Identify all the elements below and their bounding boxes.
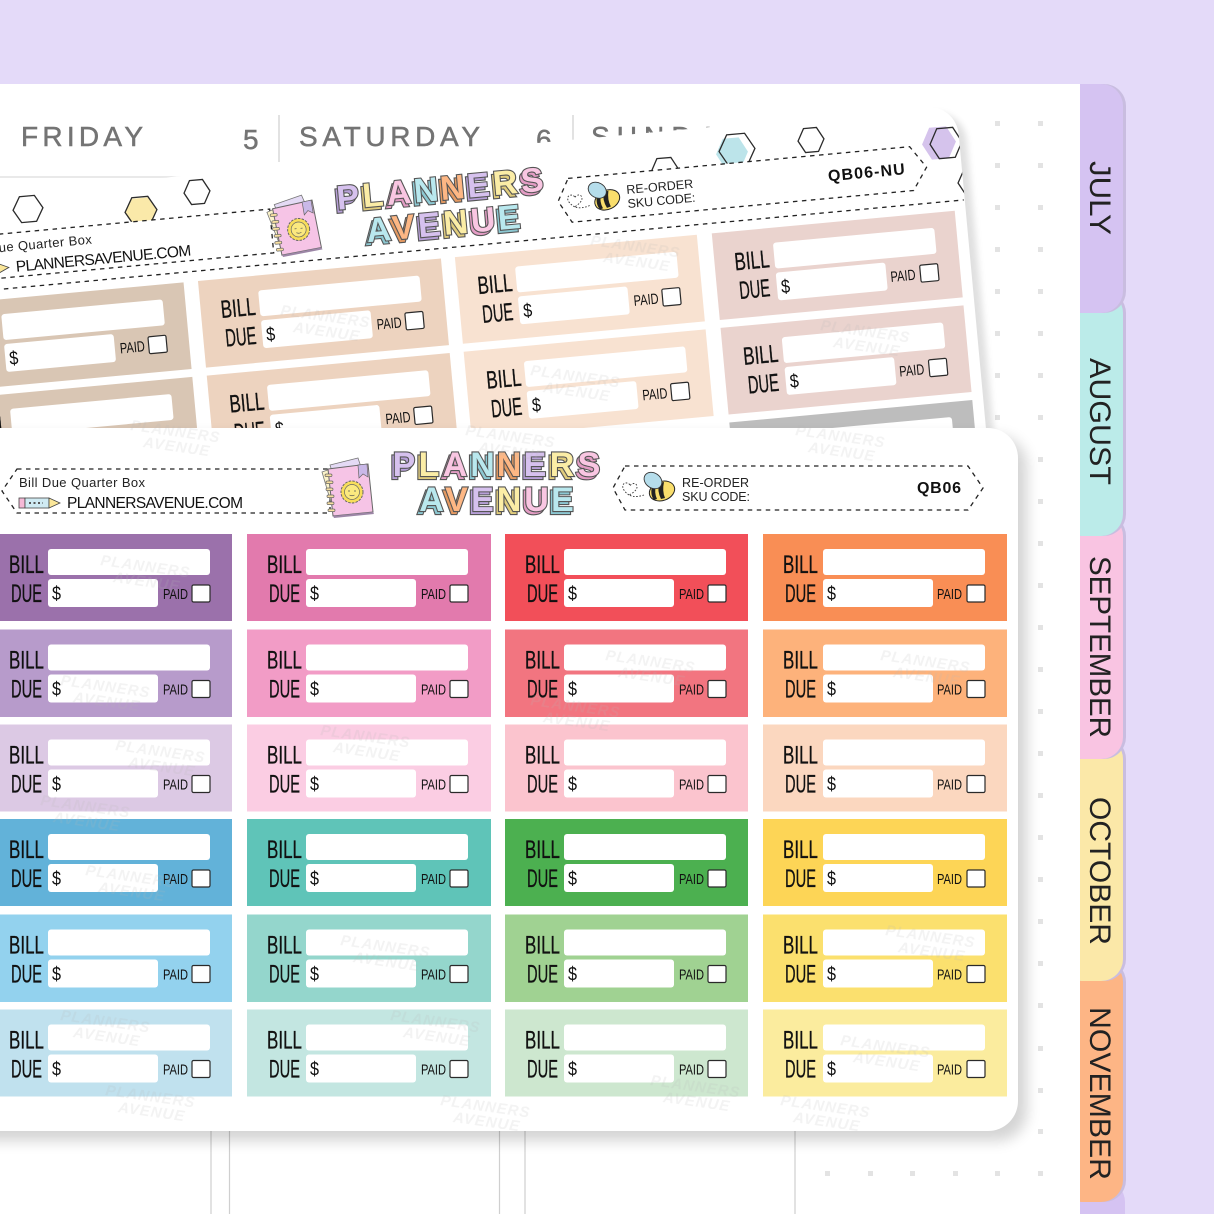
watermarks: PLANNERS [129,417,221,447]
box row 1 col 2: PAID [421,586,446,603]
box row 6 col 1: BILL [9,1026,44,1054]
box row 1 col 2 [247,534,491,621]
box row 6 col 4: PAID [937,1062,962,1078]
watermarks: AVENUE [541,379,611,405]
box row 6 col 1: DUE [11,1056,42,1084]
back box: tan top: $ [265,324,277,346]
box row 1 col 1: $ [52,584,61,605]
back sku label [556,145,929,223]
box row 4 col 4 [763,819,1007,906]
box row 4 col 2: DUE [269,865,300,893]
watermarks: PLANNERS [59,1007,151,1037]
tab: August [1060,291,1126,536]
front sku label: RE-ORDER [682,476,749,490]
box row 1 col 4 [763,534,1007,621]
box row 5 col 4: DUE [785,960,816,988]
box row 4 col 2 [247,819,491,906]
back box: peach top: BILL [476,269,514,300]
tab: October: OCTOBER [1083,797,1116,945]
front left label: Bill Due Quarter Box [19,475,146,490]
watermarks: AVENUE [71,1024,141,1050]
watermarks: PLANNERS [59,672,151,702]
back left label [0,194,323,297]
watermarks: AVENUE [96,879,166,905]
back box: peach second: BILL [485,364,523,395]
box row 6 col 1 [0,1010,232,1096]
watermarks: AVENUE [331,739,401,765]
box row 6 col 1: PAID [163,1062,188,1078]
back box: peach top [455,235,705,344]
box row 4 col 3: DUE [527,865,558,893]
box row 2 col 1: BILL [9,646,44,674]
box row 2 col 2: BILL [267,646,302,674]
page edge [1060,84,1080,1214]
box row 6 col 3: DUE [527,1056,558,1084]
box row 2 col 1: $ [52,680,61,700]
back box: tan second: DUE [233,417,266,447]
box row 3 col 4: DUE [785,770,816,798]
watermarks: PLANNERS [319,722,411,752]
planner day headings [21,121,741,155]
box row 2 col 1: DUE [11,676,42,704]
front sku label [613,466,983,510]
box row 4 col 1: DUE [11,865,42,893]
box row 6 col 2: PAID [421,1062,446,1078]
front sticker sheet: brights [0,428,1027,1141]
back logo: PLANNERS [335,161,545,218]
tab: July: JULY [1083,161,1116,235]
watermarks: AVENUE [806,439,876,465]
front logo: AVENUE [419,481,574,519]
box row 3 col 4 [763,724,1007,812]
back sku label: RE-ORDER [626,177,694,197]
back box: rose top [712,211,963,320]
back box: peach top: $ [522,300,533,322]
box row 5 col 1: PAID [163,966,188,984]
watermarks: AVENUE [71,689,141,715]
month tabs [1060,84,1126,1214]
box row 4 col 1: $ [52,869,61,890]
watermarks: AVENUE [601,249,671,275]
box row 3 col 2 [247,724,491,812]
box row 1 col 1: BILL [9,551,44,579]
back logo: AVENUE [365,198,522,250]
box row 3 col 3: DUE [527,770,558,798]
watermarks: AVENUE [116,1099,186,1125]
back logo [332,161,549,256]
planner day headings: FRIDAY [21,121,143,152]
box row 1 col 3: PAID [679,586,704,603]
box row 5 col 2: BILL [267,932,302,960]
box row 4 col 3: $ [568,869,577,890]
tab: next month [1062,1180,1125,1214]
front logo: PLANNERS [390,449,598,487]
box row 3 col 2: $ [310,774,319,796]
front sheet base [0,428,1018,1131]
back cut line [0,200,964,303]
back box: taupe top: PAID [119,338,146,357]
watermarks: PLANNERS [604,647,696,677]
box row 1 col 2: DUE [269,580,300,608]
front sku label: QB06 [917,480,961,497]
back box: peach second: $ [531,395,542,417]
watermarks: PLANNERS [464,422,556,452]
back box: taupe second [0,377,200,486]
box row 2 col 3: DUE [527,676,558,704]
watermarks: PLANNERS [39,792,131,822]
watermarks: AVENUE [831,334,901,360]
box row 6 col 4: $ [827,1060,836,1080]
tab: November [1060,960,1126,1202]
box row 6 col 2: BILL [267,1026,302,1054]
box row 1 col 4: PAID [937,586,962,603]
watermarks: AVENUE [896,939,966,965]
box row 4 col 4: BILL [783,836,818,864]
planner day headings: 6 [536,124,552,155]
watermarks: PLANNERS [529,362,621,392]
box row 2 col 2: DUE [269,676,300,704]
box row 2 col 3 [505,630,748,717]
box row 3 col 1 [0,724,232,812]
box row 3 col 1: $ [52,774,61,796]
box row 3 col 4: BILL [783,742,818,770]
watermarks: AVENUE [291,319,361,345]
back sku label: SKU CODE: [627,191,696,211]
box row 5 col 1: $ [52,964,61,986]
back box: peach second [464,329,714,438]
box row 5 col 1 [0,914,232,1002]
watermarks: PLANNERS [779,1092,871,1122]
box row 4 col 2: PAID [421,871,446,888]
box row 1 col 3: BILL [525,551,560,579]
watermarks: PLANNERS [99,552,191,582]
box row 5 col 4: PAID [937,966,962,984]
decorative hexagons [12,126,983,227]
box row 3 col 3: BILL [525,742,560,770]
watermarks: PLANNERS [649,1072,741,1102]
box row 3 col 4: PAID [937,776,962,794]
planner day headings: SUNDAY [591,121,741,152]
back box: tan top: BILL [219,293,257,324]
box row 6 col 4 [763,1010,1007,1096]
planner day headings: 5 [243,124,259,155]
back box: peach second: DUE [490,393,523,423]
planner day headings: SATURDAY [299,121,480,152]
back box: tan second: PAID [385,409,411,428]
back box: rose second: DUE [747,369,780,400]
watermarks: AVENUE [451,1109,521,1135]
watermarks: PLANNERS [104,1082,196,1112]
box row 1 col 3: $ [568,584,577,605]
watermarks: PLANNERS [819,317,911,347]
box row 6 col 3: $ [568,1060,577,1080]
front logo: PLANNERS [393,446,600,484]
box row 2 col 3: BILL [525,646,560,674]
box row 5 col 3: DUE [527,960,558,988]
box row 6 col 3: BILL [525,1026,560,1054]
watermarks: PLANNERS [589,232,681,262]
box row 4 col 2: BILL [267,836,302,864]
box row 4 col 1: BILL [9,836,44,864]
back box: rose top: BILL [733,245,771,276]
back box: peach top: DUE [481,298,514,329]
box row 3 col 3 [505,724,748,812]
box row 1 col 3 [505,534,748,621]
watermarks: AVENUE [851,1049,921,1075]
box row 1 col 1 [0,534,232,621]
box row 2 col 1: PAID [163,682,188,698]
back box: tan second: $ [274,419,285,440]
box row 2 col 4: PAID [937,682,962,698]
box row 3 col 4: $ [827,774,836,796]
box row 1 col 4: DUE [785,580,816,608]
box row 6 col 2 [247,1010,491,1096]
box row 6 col 2: $ [310,1060,319,1080]
back box: taupe top: $ [8,348,20,370]
back box: rose top: $ [780,276,791,298]
box row 2 col 1 [0,630,232,717]
box row 3 col 1: PAID [163,776,188,794]
watermarks: AVENUE [476,439,546,465]
box row 4 col 1: PAID [163,871,188,888]
back box: tan top: PAID [376,314,403,334]
box row 3 col 1: DUE [11,770,42,798]
back box: taupe top [0,282,192,391]
watermarks: AVENUE [111,569,181,595]
box row 4 col 3: BILL [525,836,560,864]
box row 1 col 3: DUE [527,580,558,608]
box row 5 col 1: BILL [9,932,44,960]
back box: rose top: DUE [738,274,771,305]
back box: peach top: PAID [633,291,660,310]
watermarks: PLANNERS [839,1032,931,1062]
box row 2 col 4: BILL [783,646,818,674]
box row 1 col 4: $ [827,584,836,605]
back box: rose second: $ [789,371,800,393]
box row 1 col 4: BILL [783,551,818,579]
front left label: PLANNERSAVENUE.COM [67,495,243,512]
watermarks: AVENUE [791,1109,861,1135]
box row 2 col 2: PAID [421,682,446,698]
watermarks: AVENUE [891,664,961,690]
back box: rose second: BILL [742,340,780,371]
watermarks: PLANNERS [84,862,176,892]
watermarks: AVENUE [401,1024,471,1050]
back box: tan second: BILL [228,387,266,419]
box row 5 col 3 [505,914,748,1002]
planner dot grid [825,121,1043,1176]
watermarks: AVENUE [541,709,611,735]
watermarks: AVENUE [126,754,196,780]
watermarks: AVENUE [141,434,211,460]
box row 6 col 4: BILL [783,1026,818,1054]
box row 3 col 2: PAID [421,776,446,794]
front sku label: SKU CODE: [682,490,750,504]
box row 2 col 3: PAID [679,682,704,698]
front logo: AVENUE [417,484,571,522]
box row 4 col 2: $ [310,869,319,890]
box row 4 col 3 [505,819,748,906]
watermarks: PLANNERS [879,647,971,677]
box row 2 col 4: DUE [785,676,816,704]
tab: November: NOVEMBER [1083,1007,1116,1180]
box row 5 col 1: DUE [11,960,42,988]
box row 1 col 1: DUE [11,580,42,608]
watermarks: PLANNERS [279,302,371,332]
back sticker sheet: neutrals [0,113,996,428]
box row 5 col 4: BILL [783,932,818,960]
box row 5 col 2 [247,914,491,1002]
back logo: PLANNERS [333,164,543,221]
box row 4 col 1 [0,819,232,906]
watermarks: PLANNERS [389,1007,481,1037]
back box: tan top: DUE [224,322,258,353]
box row 3 col 3: $ [568,774,577,796]
box row 4 col 4: PAID [937,871,962,888]
back sheet base [0,104,1021,917]
box row 6 col 3: PAID [679,1062,704,1078]
box row 4 col 4: DUE [785,865,816,893]
back left label: PLANNERSAVENUE.COM [15,243,192,276]
planner column lines [0,115,795,1214]
box row 3 col 1: BILL [9,742,44,770]
watermarks: PLANNERS [884,922,976,952]
box row 1 col 2: $ [310,584,319,605]
watermarks: PLANNERS [339,932,431,962]
back box: grey third [729,400,980,509]
box row 3 col 2: BILL [267,742,302,770]
box row 5 col 4: $ [827,964,836,986]
box row 5 col 2: DUE [269,960,300,988]
box row 6 col 3 [505,1010,748,1096]
back sku label: QB06-NU [827,161,905,185]
watermarks: AVENUE [51,809,121,835]
tab: October [1060,737,1126,981]
watermarks: PLANNERS [794,422,886,452]
box row 6 col 4: DUE [785,1056,816,1084]
box row 2 col 2: $ [310,680,319,700]
front sheet shadow [0,436,1027,1141]
back box: peach second: PAID [642,385,668,404]
box row 2 col 2 [247,630,491,717]
box row 5 col 4 [763,914,1007,1002]
box row 5 col 2: PAID [421,966,446,984]
box row 6 col 2: DUE [269,1056,300,1084]
watermarks: AVENUE [661,1089,731,1115]
box row 2 col 4: $ [827,680,836,700]
back box: tan top [198,258,449,368]
watermarks [37,232,976,1136]
front left label [2,458,374,518]
back box: rose second [721,305,972,415]
box row 2 col 4 [763,630,1007,717]
watermarks: AVENUE [616,664,686,690]
front logo [390,446,600,522]
box row 5 col 3: BILL [525,932,560,960]
watermarks: AVENUE [351,949,421,975]
watermarks: PLANNERS [439,1092,531,1122]
watermarks: PLANNERS [114,737,206,767]
box row 3 col 2: DUE [269,770,300,798]
box row 1 col 2: BILL [267,551,302,579]
watermarks: PLANNERS [529,692,621,722]
back box: rose second: PAID [899,361,925,381]
back box: tan second [207,353,458,462]
tab: July [1060,84,1126,313]
back logo: AVENUE [362,201,520,253]
back box: rose top: PAID [890,267,916,286]
box row 5 col 3: $ [568,964,577,986]
box row 6 col 1: $ [52,1060,61,1080]
tab: August: AUGUST [1083,358,1116,485]
back sheet shadow [948,113,996,428]
tab: September: SEPTEMBER [1083,556,1116,738]
box row 3 col 3: PAID [679,776,704,794]
box row 5 col 3: PAID [679,966,704,984]
box row 2 col 3: $ [568,680,577,700]
box row 4 col 3: PAID [679,871,704,888]
box row 1 col 1: PAID [163,586,188,603]
tab: September [1060,514,1126,759]
box row 5 col 2: $ [310,964,319,986]
box row 4 col 4: $ [827,869,836,890]
